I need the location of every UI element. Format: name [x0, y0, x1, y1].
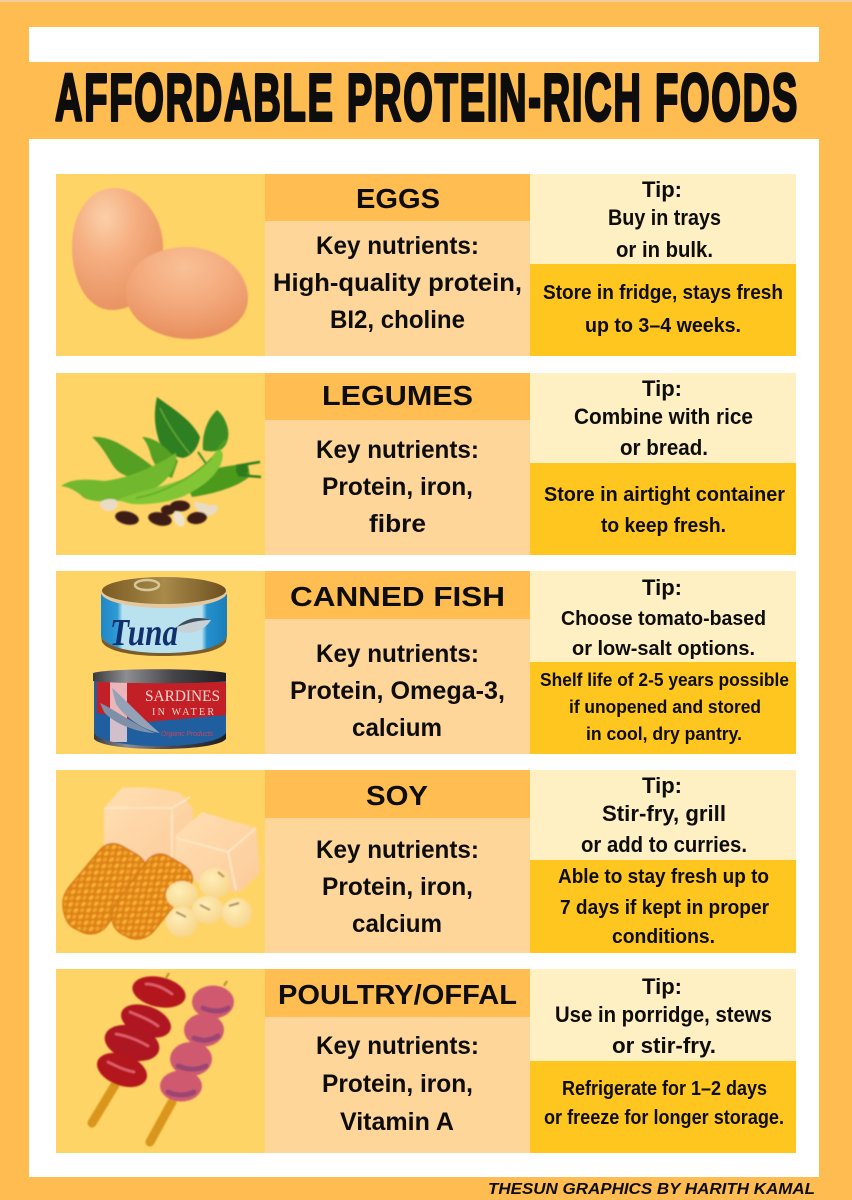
icon: tuna can: Tuna [110, 612, 178, 654]
tip: legumes [574, 376, 753, 460]
storage: poultry/offal [544, 1078, 784, 1129]
top white banner [29, 27, 819, 62]
heading: soy: SOY [366, 780, 428, 811]
storage: legumes: to keep fresh. [601, 515, 726, 537]
tip: eggs: Buy in trays [608, 205, 721, 230]
icon: tuna can [101, 577, 227, 656]
key nutrients: legumes [316, 436, 479, 538]
icon: sardines can: Organic Products [161, 731, 213, 738]
icon: skewers [92, 972, 234, 1142]
storage: soy: Able to stay fresh up to [558, 866, 769, 888]
storage: canned fish: Shelf life of 2-5 years possible [540, 669, 789, 690]
tip: soy [581, 773, 747, 857]
tip: canned fish: Choose tomato-based [561, 608, 766, 630]
tip: eggs: or in bulk. [616, 237, 713, 262]
tip: legumes: Combine with rice [574, 404, 753, 429]
credit line: THESUN GRAPHICS BY HARITH KAMAL [488, 1181, 815, 1198]
storage: soy: conditions. [612, 926, 715, 948]
heading: poultry/offal: POULTRY/OFFAL [278, 979, 517, 1010]
heading: canned fish: CANNED FISH [290, 581, 505, 612]
tip: eggs: Tip: [642, 177, 682, 202]
storage: canned fish [540, 669, 789, 744]
panel: legumes [56, 373, 796, 555]
heading: eggs: EGGS [356, 183, 440, 214]
key nutrients: eggs: Key nutrients: [316, 232, 479, 260]
key nutrients: poultry/offal: Vitamin A [340, 1108, 454, 1136]
icon: sardines can: SARDINES [145, 688, 220, 705]
key nutrients: eggs [273, 232, 522, 334]
tip: canned fish: Tip: [642, 575, 682, 600]
tip: poultry/offal [555, 974, 772, 1058]
storage: canned fish: in cool, dry pantry. [586, 723, 742, 744]
icon: sardines can: IN WATER [152, 707, 214, 718]
tip: poultry/offal: Tip: [642, 974, 682, 999]
tip: poultry/offal: or stir-fry. [612, 1033, 716, 1058]
icon: soy foods [63, 787, 260, 939]
panel: poultry/offal [56, 969, 796, 1153]
key nutrients: canned fish: calcium [352, 714, 442, 742]
icon: legumes [61, 397, 261, 528]
icon: eggs [72, 188, 248, 339]
key nutrients: poultry/offal: Protein, iron, [322, 1070, 473, 1098]
key nutrients: poultry/offal [316, 1032, 479, 1136]
key nutrients: legumes: Protein, iron, [322, 473, 473, 501]
storage: eggs [543, 282, 783, 337]
storage: canned fish: if unopened and stored [569, 696, 761, 717]
storage: soy [558, 866, 769, 948]
key nutrients: legumes: Key nutrients: [316, 436, 479, 464]
heading: legumes: LEGUMES [322, 380, 473, 411]
key nutrients: canned fish: Protein, Omega-3, [290, 677, 505, 705]
tip: soy: Tip: [642, 773, 682, 798]
panel: canned fish [56, 571, 796, 754]
tip: eggs [608, 177, 721, 262]
key nutrients: soy: Protein, iron, [322, 873, 473, 901]
tip: poultry/offal: Use in porridge, stews [555, 1002, 772, 1027]
key nutrients: eggs: BI2, choline [330, 306, 465, 334]
key nutrients: poultry/offal: Key nutrients: [316, 1032, 479, 1060]
key nutrients: soy: Key nutrients: [316, 836, 479, 864]
panel: eggs [56, 174, 796, 356]
key nutrients: soy: calcium [352, 910, 442, 938]
tip: legumes: Tip: [642, 376, 682, 401]
key nutrients: legumes: fibre [369, 510, 426, 538]
key nutrients: canned fish: Key nutrients: [316, 640, 479, 668]
tip: legumes: or bread. [620, 435, 708, 460]
storage: eggs: Store in fridge, stays fresh [543, 282, 783, 304]
key nutrients: canned fish [290, 640, 505, 742]
storage: poultry/offal: Refrigerate for 1–2 days [562, 1078, 767, 1100]
key nutrients: soy [316, 836, 479, 938]
storage: legumes: Store in airtight container [544, 484, 785, 506]
tip: canned fish [561, 575, 766, 660]
icon: sardines can [93, 669, 226, 749]
storage: poultry/offal: or freeze for longer storage. [544, 1107, 784, 1129]
storage: eggs: up to 3–4 weeks. [585, 315, 741, 337]
tip: canned fish: or low-salt options. [572, 638, 755, 660]
storage: soy: 7 days if kept in proper [560, 897, 769, 919]
tip: soy: Stir-fry, grill [602, 801, 726, 826]
tip: soy: or add to curries. [581, 832, 747, 857]
storage: legumes [544, 484, 785, 537]
panel: soy [56, 770, 796, 953]
key nutrients: eggs: High-quality protein, [273, 269, 522, 297]
